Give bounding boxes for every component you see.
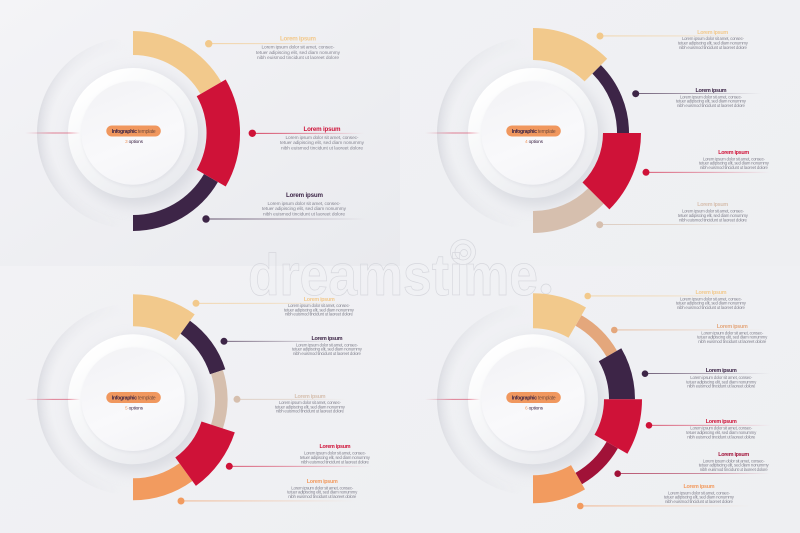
callout: dark: tetuer adipiscing elit, sed diam nonummy xyxy=(676,99,747,104)
center label: 5 options xyxy=(125,405,144,411)
callout: red xyxy=(646,419,771,439)
callout: tan: Lorem ipsum dolor sit amet, consec- xyxy=(288,303,351,308)
callout: dark: nibh euismod tincidunt ut laoreet dolore xyxy=(263,211,345,217)
callout: beige: Lorem ipsum dolor sit amet, consec- xyxy=(279,400,342,405)
center label: Infographic template xyxy=(512,129,556,135)
callout: tan xyxy=(192,297,355,317)
callout: red: Lorem ipsum xyxy=(718,150,749,156)
callout: tan: Lorem ipsum xyxy=(697,30,728,36)
callout: red: Lorem ipsum xyxy=(304,126,341,133)
callout: red: Lorem ipsum xyxy=(320,444,351,450)
callout: beige: Lorem ipsum xyxy=(697,202,728,208)
callout: beige xyxy=(234,394,347,414)
callout: red: tetuer adipiscing elit, sed diam nonummy xyxy=(699,161,770,166)
center label xyxy=(106,126,161,145)
callout: orange: Lorem ipsum dolor sit amet, consec- xyxy=(291,485,354,490)
callout: tan xyxy=(205,35,341,61)
callout: beige: tetuer adipiscing elit, sed diam nonummy xyxy=(678,213,749,218)
callout: red: nibh euismod tincidunt ut laoreet dolore xyxy=(700,165,769,170)
callout: dark red: Lorem ipsum dolor sit amet, consec- xyxy=(703,458,765,463)
center label xyxy=(506,392,561,411)
callout: beige: nibh euismod tincidunt ut laoreet dolore xyxy=(679,217,748,222)
callout: dark red: tetuer adipiscing elit, sed diam nonummy xyxy=(699,463,769,468)
callout: tan: Lorem ipsum xyxy=(280,35,316,42)
callout: red: tetuer adipiscing elit, sed diam nonummy xyxy=(280,140,365,146)
callout: orange: Lorem ipsum xyxy=(307,479,338,485)
center label: 3 options xyxy=(125,139,144,145)
callout: orange: Lorem ipsum xyxy=(684,484,715,490)
center label: Infographic template xyxy=(112,129,156,135)
callout: dark: Lorem ipsum dolor sit amet, consec- xyxy=(268,201,341,207)
callout: dark: Lorem ipsum xyxy=(286,192,323,199)
callout: orange xyxy=(577,484,752,509)
callout: light orange: nibh euismod tincidunt ut laoreet dolore xyxy=(698,339,767,344)
callout: dark: tetuer adipiscing elit, sed diam nonummy xyxy=(262,206,347,212)
callout: red: Lorem ipsum dolor sit amet, consec- xyxy=(304,451,367,456)
callout: orange: tetuer adipiscing elit, sed diam nonummy xyxy=(664,495,735,500)
callout: light orange: tetuer adipiscing elit, sed diam nonummy xyxy=(697,335,768,340)
callout: dark: nibh euismod tincidunt ut laoreet dolore xyxy=(687,384,756,389)
center label: Infographic template xyxy=(512,395,556,401)
callout: dark xyxy=(202,192,366,223)
callout: red: tetuer adipiscing elit, sed diam nonummy xyxy=(300,455,371,460)
arc segments xyxy=(533,293,642,503)
callout: tan: Lorem ipsum xyxy=(696,290,727,296)
callout: red: nibh euismod tincidunt ut laoreet dolore xyxy=(281,145,363,151)
callout: red: Lorem ipsum xyxy=(706,419,737,425)
callout: tan: tetuer adipiscing elit, sed diam nonummy xyxy=(256,50,341,56)
callout: orange xyxy=(178,479,358,504)
callout: tan: Lorem ipsum xyxy=(304,297,335,303)
callout: dark: nibh euismod tincidunt ut laoreet dolore xyxy=(293,351,362,356)
callout: tan xyxy=(596,30,750,50)
callout: orange: nibh euismod tincidunt ut laoreet dolore xyxy=(665,499,734,504)
callout: red xyxy=(249,126,365,151)
arc segments xyxy=(133,294,235,500)
center label: 4 options xyxy=(525,139,544,145)
callout: dark: tetuer adipiscing elit, sed diam nonummy xyxy=(686,379,757,384)
panel: six options xyxy=(425,290,771,509)
callout: red: Lorem ipsum dolor sit amet, consec- xyxy=(703,156,766,161)
callout: red xyxy=(642,150,770,176)
callout: dark red xyxy=(614,452,770,477)
callout: dark: nibh euismod tincidunt ut laoreet dolore xyxy=(677,103,746,108)
callout: light orange: Lorem ipsum xyxy=(717,324,748,330)
arc segments xyxy=(133,31,240,231)
base disc xyxy=(25,303,229,495)
callout: dark: tetuer adipiscing elit, sed diam nonummy xyxy=(292,347,363,352)
panel: three options xyxy=(25,31,366,231)
callout: dark red: nibh euismod tincidunt ut laoreet dolore xyxy=(700,467,768,472)
callout: tan: Lorem ipsum dolor sit amet, consec- xyxy=(682,36,745,41)
callout: light orange: Lorem ipsum dolor sit amet, consec- xyxy=(701,330,764,335)
callout: red: nibh euismod tincidunt ut laoreet dolore xyxy=(301,459,370,464)
callout: dark red: Lorem ipsum xyxy=(718,452,749,458)
base disc xyxy=(425,303,629,495)
callout: dark: Lorem ipsum dolor sit amet, consec- xyxy=(296,342,359,347)
callout: red: Lorem ipsum dolor sit amet, consec- xyxy=(690,426,753,431)
callout: orange: nibh euismod tincidunt ut laoreet dolore xyxy=(288,494,357,499)
center label: 6 options xyxy=(525,405,544,411)
arc segments xyxy=(533,28,641,233)
callout: tan: tetuer adipiscing elit, sed diam nonummy xyxy=(676,301,747,306)
callout: dark xyxy=(642,368,770,389)
callout: tan: Lorem ipsum dolor sit amet, consec- xyxy=(680,296,743,301)
callout: tan: Lorem ipsum dolor sit amet, consec- xyxy=(262,45,335,51)
base disc xyxy=(25,37,229,229)
callout: light orange xyxy=(611,324,768,344)
callout: orange: tetuer adipiscing elit, sed diam nonummy xyxy=(287,490,358,495)
callout: tan: tetuer adipiscing elit, sed diam nonummy xyxy=(678,41,749,46)
callout: beige: Lorem ipsum xyxy=(294,394,326,400)
watermark: dreamstime xyxy=(248,243,538,308)
callout: beige: tetuer adipiscing elit, sed diam nonummy xyxy=(275,404,346,409)
callout: red: tetuer adipiscing elit, sed diam nonummy xyxy=(686,430,757,435)
panel: four options xyxy=(425,28,770,233)
center label: Infographic template xyxy=(112,395,156,401)
callout: dark: Lorem ipsum dolor sit amet, consec- xyxy=(690,375,753,380)
callout: tan: tetuer adipiscing elit, sed diam nonummy xyxy=(284,307,355,312)
callout: tan: nibh euismod tincidunt ut laoreet dolore xyxy=(257,55,339,61)
callout: beige: nibh euismod tincidunt ut laoreet dolore xyxy=(276,409,345,414)
callout: dark xyxy=(632,88,761,108)
callout: dark xyxy=(220,336,363,356)
callout: tan: nibh euismod tincidunt ut laoreet dolore xyxy=(677,305,746,310)
callout: tan: nibh euismod tincidunt ut laoreet dolore xyxy=(679,45,748,50)
callout: dark: Lorem ipsum xyxy=(706,368,737,374)
callout: beige xyxy=(596,202,750,228)
callout: tan: nibh euismod tincidunt ut laoreet dolore xyxy=(285,312,354,317)
callout: red xyxy=(226,444,371,470)
callout: red: Lorem ipsum dolor sit amet, consec- xyxy=(286,135,359,141)
callout: tan xyxy=(584,290,748,310)
callout: dark: Lorem ipsum xyxy=(696,88,727,94)
base disc xyxy=(425,37,629,229)
callout: beige: Lorem ipsum dolor sit amet, consec- xyxy=(682,209,745,214)
callout: red: nibh euismod tincidunt ut laoreet dolore xyxy=(687,434,756,439)
center label xyxy=(106,392,161,411)
panel: five options xyxy=(25,294,371,504)
callout: dark: Lorem ipsum dolor sit amet, consec- xyxy=(680,94,743,99)
center label xyxy=(506,126,561,145)
callout: dark: Lorem ipsum xyxy=(312,336,343,342)
callout: orange: Lorem ipsum dolor sit amet, consec- xyxy=(668,490,731,495)
